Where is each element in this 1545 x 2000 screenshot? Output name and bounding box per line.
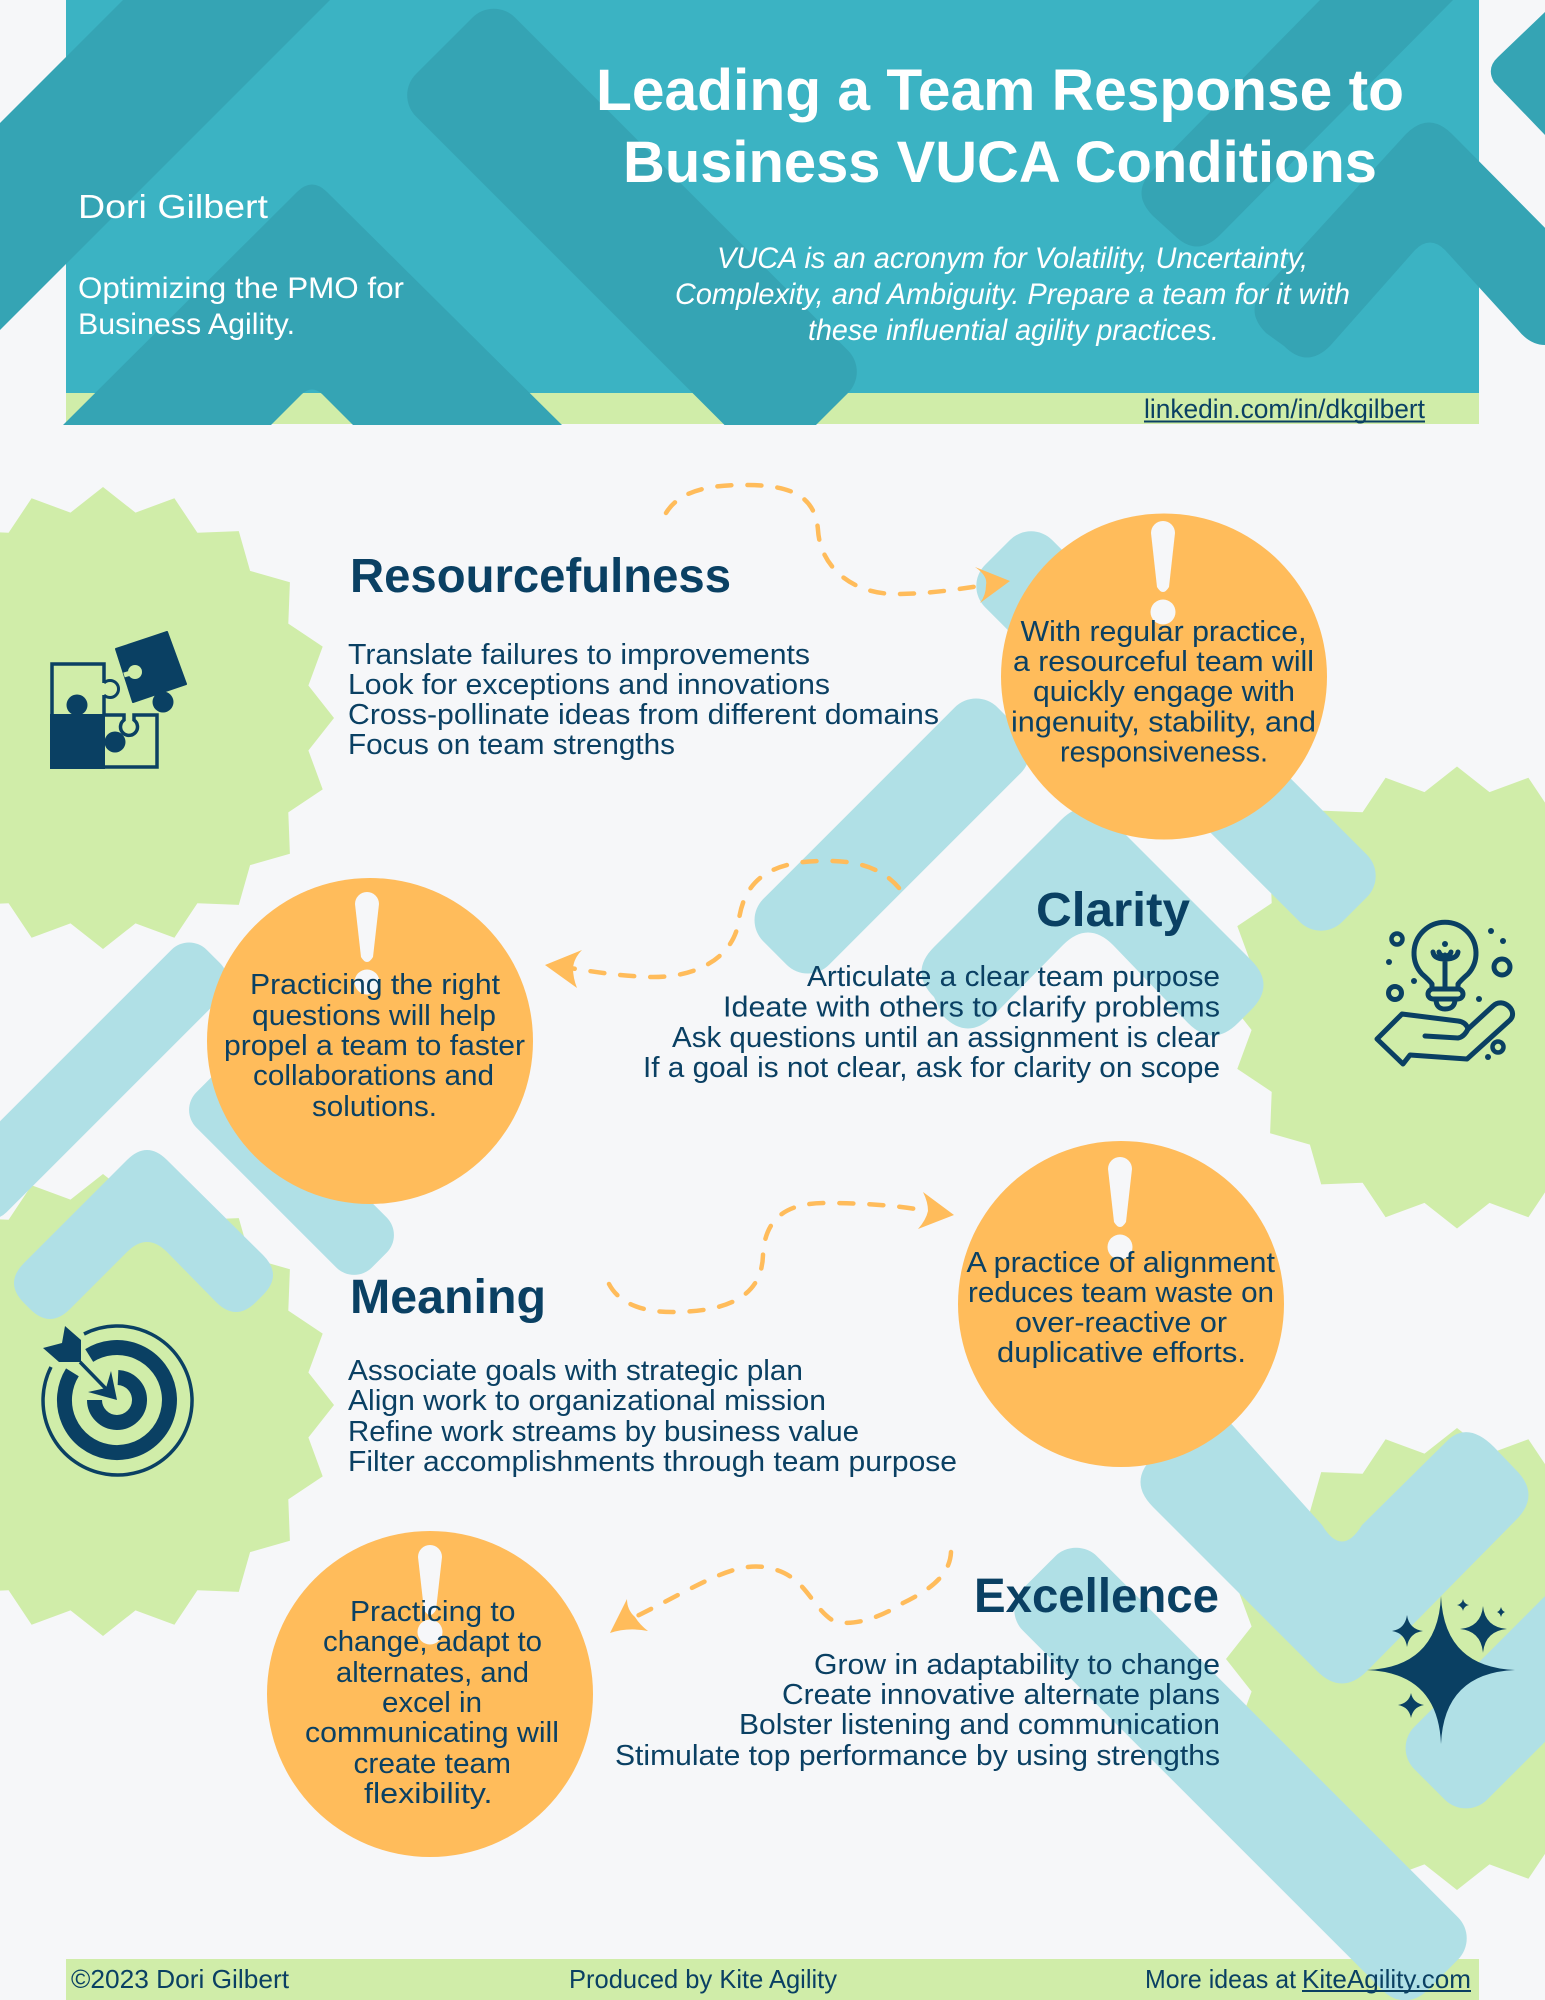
footer: website link: KiteAgility.com xyxy=(1302,1964,1471,1994)
title xyxy=(596,58,1404,195)
panel: header banner xyxy=(0,0,1545,471)
list: resourcefulness: Cross-pollinate ideas from different domains xyxy=(348,699,939,731)
list: meaning: Refine work streams by business value xyxy=(348,1416,859,1448)
badge: resourcefulness starburst xyxy=(0,487,334,949)
list: resourcefulness: Focus on team strengths xyxy=(348,729,675,761)
heading: clarity: Clarity xyxy=(1036,884,1190,937)
heading: resourcefulness: Resourcefulness xyxy=(350,550,731,603)
footer: website link: More ideas at xyxy=(1145,1964,1297,1994)
list: excellence: Create innovative alternate plans xyxy=(782,1679,1220,1711)
linkedin link: linkedin.com/in/dkgilbert xyxy=(1144,394,1425,424)
list: meaning: Associate goals with strategic plan xyxy=(348,1355,803,1387)
intro text: VUCA is an acronym for Volatility, Uncertainty, xyxy=(717,242,1308,275)
list: resourcefulness: Look for exceptions and innovations xyxy=(348,669,830,701)
arrow: meaning to callout xyxy=(609,1192,954,1312)
callout: clarity: questions will help xyxy=(252,1000,496,1032)
list: excellence: Bolster listening and communication xyxy=(739,1709,1220,1741)
callout: resourcefulness: quickly engage with xyxy=(1033,676,1295,708)
list: clarity: Ask questions until an assignment is clear xyxy=(672,1022,1220,1054)
arrow: clarity to callout xyxy=(545,861,899,988)
badge: clarity starburst xyxy=(1226,766,1545,1228)
list: excellence: Grow in adaptability to change xyxy=(814,1649,1220,1681)
callout: meaning: A practice of alignment xyxy=(966,1247,1275,1279)
intro text: Complexity, and Ambiguity. Prepare a team for it with xyxy=(675,278,1350,311)
callout: meaning: over-reactive or xyxy=(1015,1307,1227,1339)
callout: clarity xyxy=(207,878,533,1204)
footer: copyright: ©2023 Dori Gilbert xyxy=(71,1964,290,1994)
badge: meaning starburst xyxy=(0,1174,334,1636)
list: meaning xyxy=(348,1355,957,1478)
callout: clarity: solutions. xyxy=(312,1091,437,1123)
subtitle: Optimizing the PMO for xyxy=(78,272,404,305)
callout: meaning: duplicative efforts. xyxy=(997,1337,1246,1369)
callout: excellence: excel in xyxy=(382,1687,482,1719)
list: excellence: Stimulate top performance by using strengths xyxy=(615,1740,1220,1772)
subtitle xyxy=(78,272,404,341)
intro text xyxy=(675,242,1350,347)
icon: sparkles xyxy=(1367,1596,1515,1744)
arrow: excellence to callout xyxy=(610,1552,951,1633)
callout: excellence: communicating will xyxy=(305,1717,559,1749)
light blue chevron backdrop shapes xyxy=(0,519,1545,2000)
callout: meaning: reduces team waste on xyxy=(968,1277,1274,1309)
subtitle: Business Agility. xyxy=(78,308,295,341)
author name: Dori Gilbert xyxy=(78,188,268,225)
list: excellence xyxy=(615,1649,1220,1772)
footer strip xyxy=(66,1959,1479,2000)
callout: resourcefulness: ingenuity, stability, and xyxy=(1011,706,1316,738)
callout: resourcefulness: a resourceful team will xyxy=(1013,646,1314,678)
list: meaning: Align work to organizational mission xyxy=(348,1385,826,1417)
callout: excellence: Practicing to xyxy=(350,1596,516,1628)
callout: meaning xyxy=(958,1141,1284,1467)
callout: clarity: Practicing the right xyxy=(250,969,500,1001)
list: resourcefulness xyxy=(348,639,939,761)
arrow: resourcefulness to callout xyxy=(666,485,1010,603)
icon: puzzle xyxy=(50,632,186,769)
list: resourcefulness: Translate failures to improvements xyxy=(348,639,810,671)
callout: excellence: flexibility. xyxy=(364,1778,492,1810)
callout: excellence: change, adapt to xyxy=(323,1626,542,1658)
callout: resourcefulness: responsiveness. xyxy=(1060,736,1268,768)
heading: excellence: Excellence xyxy=(974,1570,1219,1623)
callout: excellence: create team xyxy=(354,1748,511,1780)
intro text: these influential agility practices. xyxy=(808,314,1219,347)
list: clarity: If a goal is not clear, ask for clarity on scope xyxy=(643,1052,1220,1084)
list: meaning: Filter accomplishments through team purpose xyxy=(348,1446,957,1478)
footer: website link xyxy=(1145,1964,1471,1994)
title: Business VUCA Conditions xyxy=(623,130,1377,195)
title: Leading a Team Response to xyxy=(596,58,1404,123)
heading: meaning: Meaning xyxy=(350,1271,546,1324)
list: clarity: Ideate with others to clarify problems xyxy=(723,992,1220,1024)
list: clarity xyxy=(643,961,1220,1084)
callout: clarity: propel a team to faster xyxy=(224,1030,525,1062)
callout: excellence: alternates, and xyxy=(336,1657,529,1689)
callout: clarity: collaborations and xyxy=(253,1060,494,1092)
badge: excellence starburst xyxy=(1226,1428,1545,1890)
callout: resourcefulness xyxy=(1001,514,1327,840)
icon: target with arrow xyxy=(43,1326,192,1475)
callout: excellence xyxy=(267,1531,593,1857)
callout: resourcefulness: With regular practice, xyxy=(1020,616,1306,648)
footer: producer: Produced by Kite Agility xyxy=(569,1964,837,1994)
list: clarity: Articulate a clear team purpose xyxy=(807,961,1220,993)
icon: lightbulb in hand xyxy=(1377,922,1513,1064)
